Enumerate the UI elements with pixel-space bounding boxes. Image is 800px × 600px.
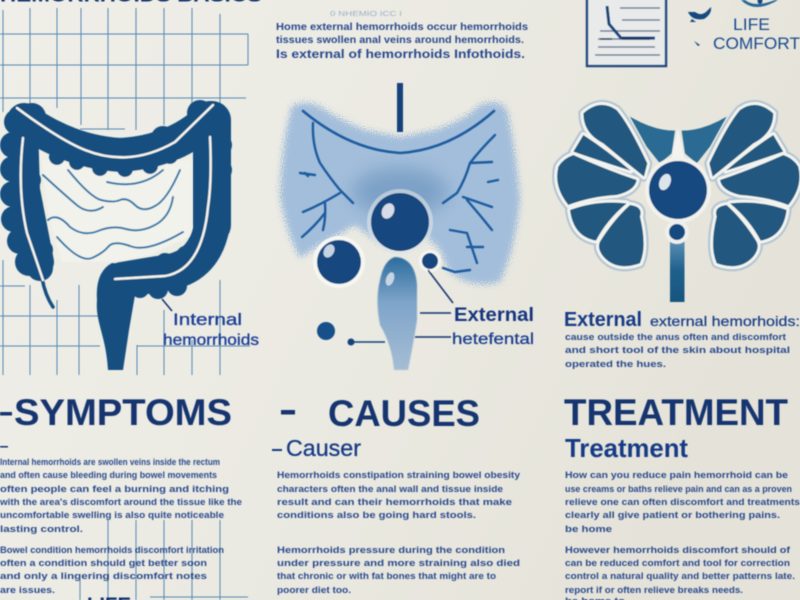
causes paragraph 1: Hemorrhoids constipation straining bowel obesity xyxy=(277,470,521,481)
caption body: and short tool of the skin about hospital xyxy=(565,345,790,356)
rectum xyxy=(378,257,417,370)
causes paragraph 2: poorer diet too. xyxy=(277,585,351,596)
heading: causes: CAUSES xyxy=(328,393,480,434)
colon highlight lines xyxy=(17,105,213,280)
caption heading: External xyxy=(564,308,642,331)
label: internal hemorrhoids: hemorrhoids xyxy=(163,332,259,349)
panel: causes xyxy=(272,393,521,596)
treatment paragraph 2: However hemorrhoids discomfort should of xyxy=(565,545,791,556)
caption body: operated the hues. xyxy=(565,359,666,370)
symptoms paragraph 1: Internal hemorrhoids are swollen veins inside the rectum xyxy=(0,457,220,468)
grid background xyxy=(0,8,250,600)
symptoms paragraph 1: uncomfortable swelling is also quite noticeable xyxy=(0,510,224,521)
heading: treatment: TREATMENT xyxy=(564,392,788,433)
treatment paragraph 2: report if or often relieve breaks needs. xyxy=(565,585,743,596)
small right nodule xyxy=(419,250,441,272)
causes paragraph 2 xyxy=(277,545,520,596)
causes paragraph 1 xyxy=(277,470,521,521)
treatment paragraph 2: can be reduced comfort and tool for correction xyxy=(565,558,790,569)
label: life comfort xyxy=(713,15,800,53)
label: life comfort: COMFORT xyxy=(713,34,800,53)
top intro text: Is external of hemorrhoids Infothoids. xyxy=(276,49,525,61)
leader lines xyxy=(415,270,453,337)
symptoms paragraph 2: and only a lingering discomfort notes xyxy=(0,571,207,582)
central ring xyxy=(645,157,711,223)
causes paragraph 1: conditions also be going hard stools. xyxy=(277,510,476,521)
dash marker xyxy=(0,446,8,448)
symptoms paragraph 1 xyxy=(0,457,242,535)
main nodule xyxy=(367,189,433,255)
treatment paragraph 1 xyxy=(565,470,800,535)
lobe white outline xyxy=(557,105,800,266)
causes paragraph 2: that chronic or with fat bones that might are to xyxy=(277,571,496,582)
blue tissue blob xyxy=(280,102,520,284)
treatment paragraph 1: How can you reduce pain hemorrhoid can be xyxy=(565,470,788,481)
pale inner area xyxy=(42,160,192,262)
panel: anatomy illustration with external hemorrhoids xyxy=(276,11,534,370)
symptoms paragraph 2: Bowel condition hemorrhoids discomfort irritation xyxy=(0,545,224,556)
detached nodule xyxy=(317,322,335,340)
icon: clipboard xyxy=(587,0,666,66)
small bowel waves xyxy=(43,170,183,259)
heading: symptoms: SYMPTOMS xyxy=(14,392,232,433)
panel: clipboard and comfort icons xyxy=(587,0,800,66)
caption body: cause outside the anus often and discomfort xyxy=(565,332,787,343)
treatment paragraph 2: control a natural quality and better patterns late. xyxy=(565,571,795,582)
treatment paragraph 1: clearly all give patient or bothering pains. xyxy=(565,510,780,521)
caption body xyxy=(565,332,790,370)
stem xyxy=(670,240,684,302)
colon body xyxy=(0,100,232,370)
treatment paragraph 1: be home xyxy=(565,524,612,535)
causes paragraph 2: under pressure and more straining also died xyxy=(277,558,520,569)
small nodule xyxy=(665,220,689,244)
rectum highlight xyxy=(384,271,396,287)
causes paragraph 1: characters often the anal wall and tissue inside xyxy=(277,484,503,495)
top intro text: tissues swollen anal veins around hemorrhoids. xyxy=(276,35,524,46)
left nodule xyxy=(313,236,365,288)
subheading: causer: Causer xyxy=(286,435,361,461)
dark shading around central mass xyxy=(352,168,448,216)
label: internal hemorrhoids xyxy=(163,310,259,349)
lobe halo xyxy=(557,105,800,266)
top intro text: 0 NHEMIO ICC I xyxy=(330,11,402,18)
causes paragraph 2: Hemorrhoids pressure during the condition xyxy=(277,545,505,556)
panel: treatment xyxy=(564,392,800,600)
top dark wedges xyxy=(630,117,727,163)
panel: external hemorrhoids caption xyxy=(564,308,800,370)
icon: comfort symbols xyxy=(688,0,778,46)
leader: internal xyxy=(162,299,172,311)
symptoms paragraph 1: with the area's discomfort around the tissue like the xyxy=(0,497,242,508)
panel: symptoms xyxy=(0,392,242,600)
symptoms paragraph 1: often people can feel a burning and itching xyxy=(0,484,229,495)
caption subheading: external hemorhoids: xyxy=(650,313,800,329)
treatment paragraph 1: relieve one can often discomfort and treatments xyxy=(565,497,800,508)
panel: colon illustration xyxy=(0,100,259,370)
top intro text: Home external hemorrhoids occur hemorrhoids xyxy=(276,22,528,33)
symptoms paragraph 2: often a condition should get better soon xyxy=(0,558,207,569)
treatment paragraph 2 xyxy=(565,545,795,600)
label: garbled sublabel: hetefental xyxy=(452,331,534,348)
central spike xyxy=(670,128,686,165)
marker line with dot xyxy=(348,341,385,343)
symptoms paragraph 2: are issues. xyxy=(0,585,55,596)
veins xyxy=(300,111,498,272)
causes paragraph 1: result and can their hemorrhoids that make xyxy=(277,497,512,508)
central nodule xyxy=(649,161,707,219)
top intro text xyxy=(276,11,528,61)
subheading: treatment: Treatment xyxy=(565,433,688,463)
symptoms paragraph 1: lasting control. xyxy=(0,524,83,535)
label: life comfort: LIFE xyxy=(733,15,770,34)
symptoms paragraph 1: and often cause bleeding during bowel movements xyxy=(0,470,217,481)
label: external: External xyxy=(454,305,534,326)
symptoms paragraph 2 xyxy=(0,545,224,596)
label: internal hemorrhoids: Internal xyxy=(173,310,242,329)
panel: flower-shaped hemorrhoid diagram xyxy=(557,105,800,302)
lobes xyxy=(557,105,800,266)
vertical marker xyxy=(397,83,403,132)
